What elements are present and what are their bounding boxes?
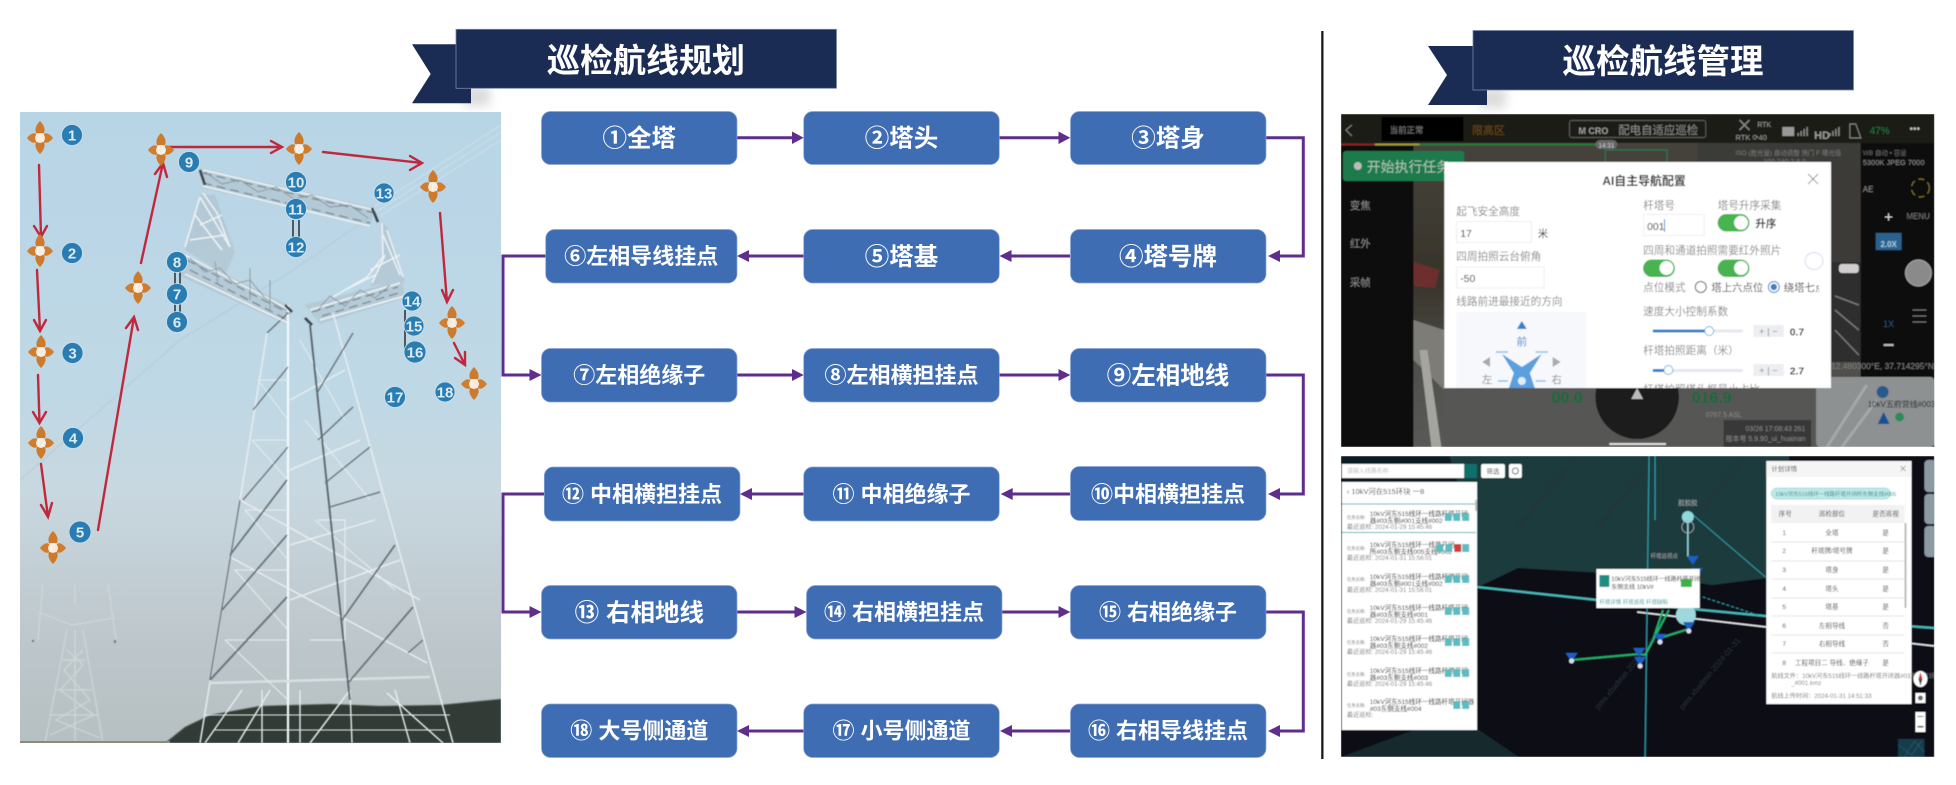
right column settings: + | − [1759, 326, 1778, 338]
numbered blue points: 11 [288, 202, 304, 218]
numbered blue points: 13 [376, 186, 392, 202]
map terrain [1341, 456, 1789, 757]
right camera controls: 5300K JPEG 7000 [1863, 158, 1924, 167]
arm and waist mottled bands [180, 168, 405, 326]
inspection detail panel: 航线上传时间：2024-01-31 14:51:33 [1771, 692, 1872, 700]
right camera controls: MENU [1907, 212, 1930, 221]
numbered blue points: 10 [288, 174, 304, 192]
watermark text: pms.xbadmin 2024-01-31 [1514, 456, 1579, 531]
dialog heading: AI自主导航配置 [1602, 173, 1686, 188]
camera view [1413, 142, 1861, 447]
right column settings: 杆塔拍照距离（米） [1643, 344, 1739, 357]
route list panel: 10kV河东515线环一线路杆塔开闭 [1370, 634, 1468, 643]
tower info popup: 东侧支线 10kV# [1611, 583, 1654, 591]
camera parameter readout: 100 240 2.8 0 [1763, 159, 1806, 166]
watermark text: pms.xbadmin 2024-01-31 [1678, 636, 1743, 711]
route list panel: ‹ 10kV河在515环块 一8 [1347, 486, 1424, 496]
waypoint markers A-K: K [470, 380, 478, 390]
numbered blue points: 6 [173, 314, 181, 332]
inspection detail panel: 4 [1782, 586, 1786, 593]
right camera controls [1861, 143, 1934, 447]
route list panel: 最近巡检: 2024-01-29 15:45:46 [1347, 648, 1433, 656]
inspection detail panel: 是 [1882, 585, 1889, 593]
inspection detail panel: 塔基 [1825, 602, 1839, 611]
inspection detail panel: 5 [1782, 604, 1786, 611]
left column settings: 左 [1482, 373, 1492, 386]
screenshot: AI navigation configuration [1341, 114, 1936, 447]
numbered blue points: 2 [68, 246, 76, 262]
top status bar: 当前正常 [1390, 125, 1423, 135]
flow step boxes: ⑦左相绝缘子 [573, 363, 705, 388]
route list panel: 最近巡检: 2024-01-29 15:45:46 [1347, 523, 1433, 531]
left column settings: 17 [1460, 229, 1472, 240]
small distant tower [33, 583, 116, 743]
right column settings: 塔上六点位 [1711, 281, 1763, 294]
route list panel: 最近巡检: 2024-01-31 15:56:01 [1347, 554, 1433, 562]
route list panel: 任务名称: [1347, 639, 1366, 646]
compass and telemetry [1552, 388, 1742, 440]
route list panel: 器#03东侧支线#003 [1370, 673, 1428, 682]
version timestamp: 03/26 17:08:43 261 [1745, 426, 1805, 433]
title: inspection route management: 巡检航线管理 [1562, 44, 1764, 81]
inspection detail panel: 7 [1782, 641, 1786, 648]
right column settings: 001 [1647, 222, 1665, 233]
inspection detail panel: 否 [1882, 622, 1889, 630]
inspection detail panel: 全塔 [1825, 528, 1839, 537]
inspection detail panel: 塔头 [1825, 584, 1839, 593]
right column settings: 速度大小控制系数 [1643, 305, 1728, 318]
route list panel: 10kV河东515线环一线路杆塔开闭器 [1370, 697, 1475, 706]
numbered blue points: 15 [406, 318, 422, 336]
inspection detail panel: 是 [1882, 547, 1889, 555]
numbered blue points: 9 [185, 154, 193, 172]
right column settings: 0.7 [1790, 327, 1804, 339]
tree line [165, 699, 501, 743]
numbered blue points: 8 [173, 254, 181, 272]
route list panel: 器#03东侧支线#001 [1370, 610, 1428, 619]
top status bar: 配电自适应巡检 [1618, 123, 1699, 137]
route list panel: 最近巡检: 2024-01-29 15:45:46 [1347, 680, 1433, 688]
watermark text: pms.xbadmin 2024-01-31 [1593, 456, 1658, 531]
route list panel: #03东侧支线#004 [1370, 704, 1422, 713]
inspection detail panel: 巡检部位 [1819, 509, 1845, 518]
route list panel: 器#03东侧#001支线#002 [1370, 579, 1443, 588]
top status bar: RTK [1757, 122, 1772, 129]
waypoint markers A-K [27, 121, 487, 564]
version timestamp [1609, 420, 1811, 447]
waypoint markers A-K: D [37, 438, 45, 450]
panel: tower photo with waypoints [20, 112, 501, 743]
flow step boxes: ④塔号牌 [1119, 243, 1217, 271]
inspection detail panel: 10kV河东515线环一线路杆塔开闭所东侧支线#005 [1775, 490, 1896, 498]
inspection detail panel: 是 [1882, 659, 1889, 667]
flow step boxes: ⑰ 小号侧通道 [832, 718, 971, 744]
route list panel: 任务名称: [1347, 514, 1366, 521]
inspection detail panel [1766, 461, 1935, 704]
route list panel: 10kV河东515线环一线路开闭 [1370, 540, 1455, 549]
left function menu: 红外 [1350, 237, 1371, 250]
inspection detail panel: 是否巡视 [1873, 509, 1899, 518]
search bar: 请输入线路名称 [1347, 467, 1389, 475]
route list panel: 器#03东侧#001支线#002 [1370, 516, 1443, 525]
inspection detail panel: 1 [1782, 530, 1786, 537]
route list panel: 10kV河东515线环一线路杆塔开闭 [1370, 603, 1468, 612]
map thumbnail: 10kV五府营线#003 [1868, 399, 1936, 409]
right camera controls: + [1884, 209, 1893, 226]
numbered blue points [62, 124, 455, 543]
route list panel: 所#03东侧支线005支线#002 [1370, 547, 1452, 556]
title: inspection route management [1428, 30, 1854, 108]
route list panel: 10kV河东515线环一线路杆塔开闭 [1370, 572, 1468, 581]
camera parameter readout: ISO (胜光量) 自动调整 快门 F 曝光值 [1736, 148, 1842, 157]
waypoint markers A-K: I [432, 182, 435, 194]
transmission lines [1477, 456, 1934, 757]
inspection detail panel: 左相导线 [1819, 621, 1845, 630]
flow step boxes: ⑭ 右相横担挂点 [824, 600, 984, 625]
vertical divider [1321, 31, 1324, 759]
flow connector arrows [503, 132, 1303, 737]
route list panel: 10kV河东515线环一线路杆塔开闭 [1370, 509, 1468, 518]
route list panel: 最近巡检: 2024-01-31 15:56:01 [1347, 586, 1433, 594]
watermark text: pms.xbadmin 2024-01-31 [1593, 636, 1658, 711]
inspection detail panel: 8 [1782, 660, 1786, 667]
route list panel: 任务名称: [1347, 671, 1366, 678]
numbered blue points: 3 [68, 346, 77, 362]
inspection detail panel: 塔身 [1825, 565, 1839, 574]
flow step boxes: ⑱ 大号侧通道 [570, 718, 708, 744]
left column settings: -50 [1460, 274, 1475, 285]
route list panel [1342, 482, 1477, 730]
right column settings: 塔号升序采集 [1718, 199, 1782, 212]
flow step boxes: ⑪ 中相绝缘子 [832, 482, 971, 507]
watermark text [1514, 456, 1748, 711]
icon: drone [1496, 352, 1548, 388]
compass and telemetry: 00.0 [1552, 390, 1583, 407]
flow step boxes: ⑥左相导线挂点 [564, 244, 718, 269]
flow step boxes: ⑩中相横担挂点 [1091, 482, 1245, 507]
flow step boxes: ⑧左相横担挂点 [824, 363, 979, 388]
left function menu [1343, 151, 1464, 289]
numbered blue points: 12 [288, 240, 304, 256]
inspection detail panel: 否 [1882, 640, 1889, 648]
right column settings: 点位模式 [1643, 281, 1686, 294]
right column settings: 杆塔拍照塔头框最小占比 [1643, 383, 1760, 396]
towers and nodes [1566, 498, 1703, 668]
right column settings [1643, 199, 1836, 396]
tower lattice [180, 168, 453, 743]
flight progress bar: 14:31 [1598, 142, 1615, 150]
right camera controls: 1X [1883, 319, 1894, 329]
top status bar: M CRO [1578, 126, 1608, 136]
inspection detail panel: 3 [1782, 567, 1786, 574]
inspection detail panel: 右相导线 [1819, 639, 1845, 648]
top status bar: 47% [1870, 126, 1890, 137]
right column settings: 升序 [1755, 217, 1776, 230]
route list panel: 任务名称: [1347, 576, 1366, 583]
inspection detail panel: 2 [1782, 548, 1786, 555]
cross arms [185, 170, 405, 324]
tower info popup: 10kV河东515线环一线路杆塔开闭器 [1611, 575, 1706, 583]
right camera controls: WB 自动 ▪ 容量 [1863, 148, 1907, 157]
waypoint markers A-K: E [50, 544, 57, 554]
camera parameter readout [1736, 149, 1841, 162]
waypoint markers A-K: A [36, 134, 44, 144]
top status bar: RTK ⟳40 [1736, 133, 1767, 142]
route list panel: 10kV河东515线环一线路杆塔开闭 [1370, 666, 1468, 675]
inspection detail panel: 计划详情 [1771, 464, 1798, 473]
waypoint markers A-K: G [157, 146, 165, 156]
numbered blue points: 17 [387, 390, 403, 406]
title: inspection route planning [412, 29, 836, 106]
compass and telemetry: 016.9 [1692, 390, 1732, 407]
right column settings: 绕塔七点位 [1784, 281, 1836, 294]
flow step boxes: ⑨左相地线 [1107, 362, 1229, 390]
top status bar: ••• [1910, 124, 1920, 135]
flight progress bar [1341, 140, 1617, 150]
distant wires [20, 125, 501, 480]
numbered blue points: 4 [69, 430, 78, 448]
flow step boxes: ①全塔 [603, 124, 676, 152]
numbered blue points: 16 [407, 344, 423, 362]
left column settings: 前 [1517, 335, 1527, 348]
version timestamp: 版本号 5.9.90_ui_huainan [1726, 434, 1806, 443]
route list panel: 最近巡检: 2024-01-29 15:45:46 [1347, 617, 1433, 625]
top status bar [1341, 114, 1934, 143]
compass and telemetry: 0767.5 ASL [1706, 412, 1742, 419]
waypoint markers A-K: C [37, 348, 45, 358]
tower info popup [1596, 569, 1706, 608]
route list panel: 任务名称: [1347, 608, 1366, 615]
screenshot: route management 3D map [1341, 456, 1936, 757]
numbered blue points: 14 [404, 294, 421, 310]
route list panel: 器#03东侧支线#002 [1370, 641, 1428, 650]
waypoint markers A-K: B [36, 246, 44, 258]
route list panel: 任务名称: [1347, 702, 1366, 709]
inspection detail panel: 6 [1782, 623, 1786, 630]
route list panel: 任务名称: [1347, 545, 1366, 552]
left column settings: 线路前进最接近的方向 [1456, 295, 1562, 308]
left function menu: 变焦 [1350, 199, 1371, 212]
left function menu: 开始执行任务 [1367, 159, 1450, 175]
left column settings [1456, 205, 1586, 388]
map controls [1898, 671, 1927, 757]
left function menu: 采帧 [1350, 276, 1371, 289]
waypoint markers A-K: F [135, 284, 141, 294]
right column settings: 四周和通道拍照需要红外照片 [1643, 244, 1781, 257]
right camera controls: 2.0X [1880, 240, 1897, 249]
flow step boxes: ⑮ 右相绝缘子 [1099, 600, 1237, 625]
right column settings: 2.7 [1790, 366, 1804, 378]
right column settings: 杆塔号 [1643, 199, 1675, 212]
inspection detail panel: 杆塔牌/塔号牌 [1811, 546, 1853, 555]
flow step boxes: ⑫ 中相横担挂点 [562, 482, 722, 507]
numbered blue points: 5 [76, 524, 84, 542]
configuration dialog [1444, 162, 1836, 396]
tower info popup: 杆塔详情 杆塔巡视 杆塔缺陷 [1599, 598, 1668, 606]
flow step boxes: ②塔头 [865, 124, 938, 152]
towers and nodes: 胶胶胶 [1678, 498, 1698, 507]
flow step boxes [542, 112, 1266, 758]
flow step boxes: ⑬ 右相地线 [575, 599, 704, 627]
flow step boxes: ③塔身 [1131, 124, 1205, 152]
red route arrows [33, 141, 465, 530]
towers and nodes: 杆塔巡视点 [1651, 552, 1678, 560]
left column settings: 米 [1538, 227, 1549, 240]
watermark text: pms.xbadmin 2024-01-31 [1682, 456, 1748, 531]
top status bar: 限高区 [1472, 123, 1505, 137]
route list panel: 最近巡检: [1347, 711, 1374, 719]
title: inspection route planning: 巡检航线规划 [547, 42, 745, 79]
left column settings: 四周拍照云台俯角 [1456, 250, 1541, 263]
left column settings: 右 [1551, 373, 1562, 386]
numbered blue points: 7 [173, 286, 181, 304]
insulator strings [175, 220, 405, 350]
search bar: 筛选 [1487, 466, 1500, 476]
left column settings: 起飞安全高度 [1456, 205, 1520, 218]
numbered blue points: 18 [437, 384, 453, 402]
right map tabs [1924, 460, 1936, 557]
search bar [1342, 464, 1522, 478]
inspection detail panel: _#001.kmz [1790, 680, 1821, 687]
map thumbnail [1816, 361, 1936, 447]
inspection detail panel: 工程项目二 导线、绝缘子 [1795, 658, 1869, 667]
inspection detail panel: 是 [1882, 603, 1889, 611]
flow step boxes: ⑯ 右相导线挂点 [1088, 718, 1248, 744]
inspection detail panel: 是 [1882, 566, 1889, 574]
map thumbnail: 12.480300°E, 37.714295°N [1831, 361, 1934, 371]
right column settings: + | − [1759, 365, 1778, 377]
numbered blue points: 1 [68, 128, 76, 144]
inspection detail panel: 序号 [1779, 509, 1792, 518]
waypoint markers A-K: J [449, 318, 455, 330]
right camera controls: AE [1863, 185, 1873, 194]
flow step boxes: ⑤塔基 [865, 243, 938, 271]
waypoint markers A-K: H [295, 144, 303, 156]
inspection detail panel: 是 [1882, 529, 1889, 537]
top status bar: HD [1814, 130, 1830, 142]
inspection detail panel: 航线文件：10kV河东515线环一线路杆塔开闭器#03东侧支线 [1771, 672, 1935, 680]
